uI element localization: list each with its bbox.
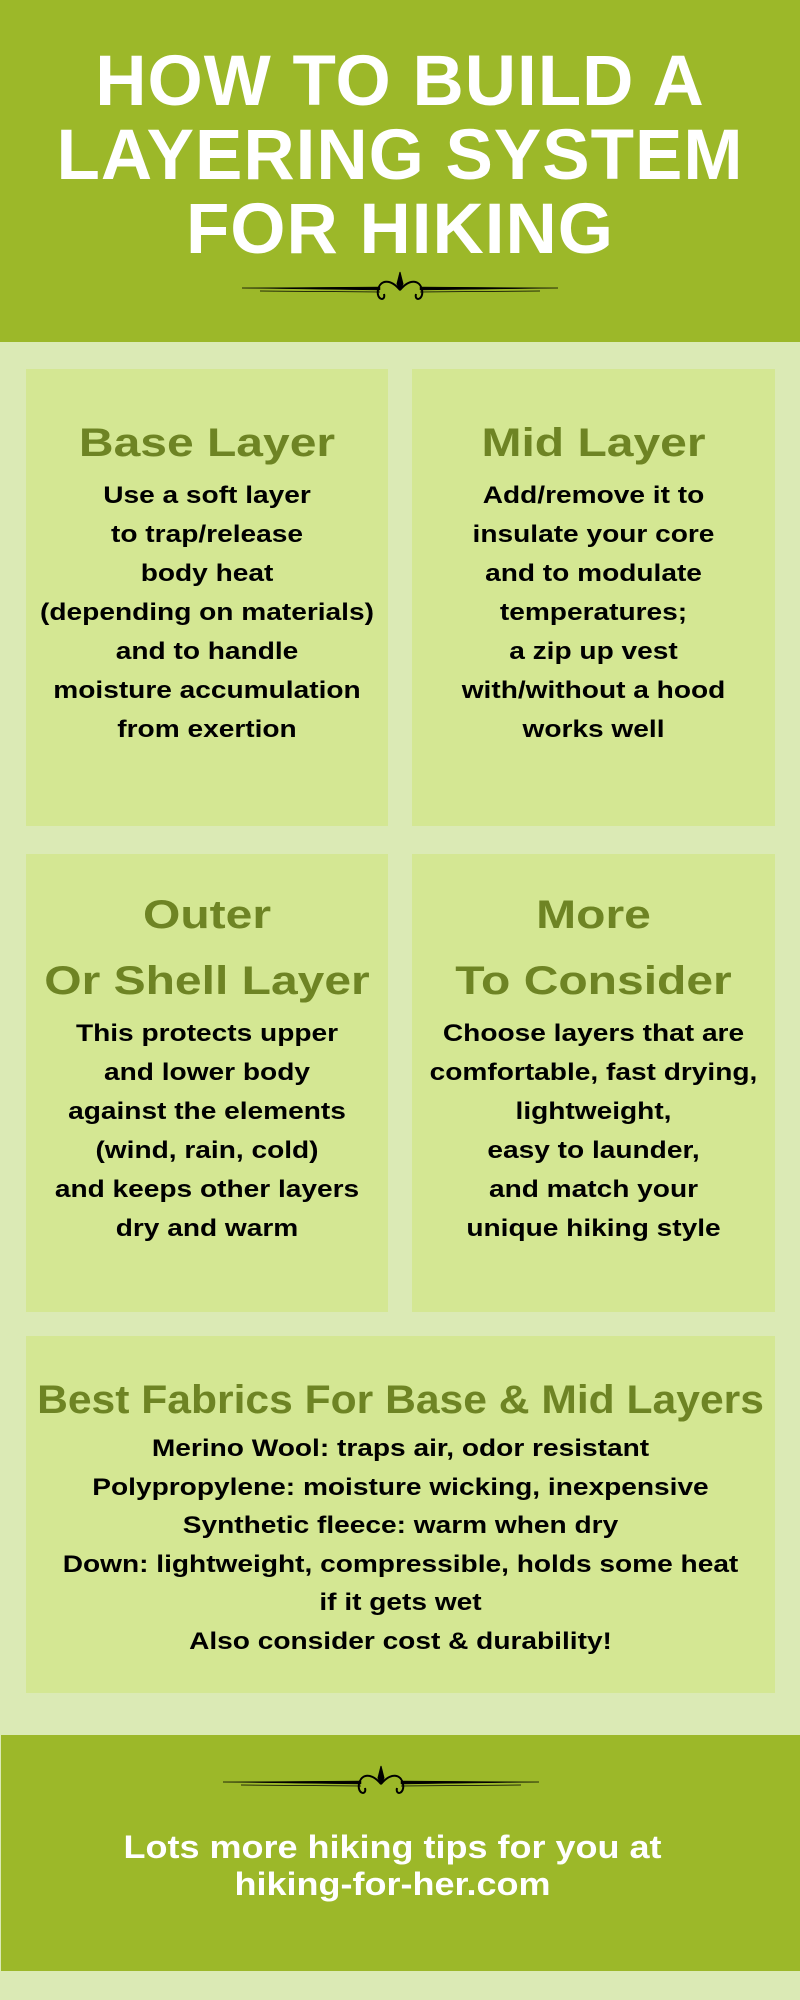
text: mid layer: works well: [522, 716, 665, 743]
text: fabrics list: Polypropylene: moisture wicking, inexpensive: [92, 1474, 709, 1500]
title: HOW TO BUILD A: [95, 42, 705, 121]
text: mid layer: and to modulate: [485, 560, 702, 587]
heading: mid layer: Mid Layer: [481, 421, 706, 465]
text: fabrics list: if it gets wet: [319, 1589, 482, 1616]
panel: outer layer: [26, 854, 388, 1312]
text: base layer: from exertion: [117, 716, 297, 743]
title: [56, 42, 744, 269]
text: base layer: moisture accumulation: [53, 677, 361, 704]
text: mid layer: Add/remove it to: [483, 482, 704, 509]
panel: more to consider: [412, 854, 775, 1312]
header banner: [0, 0, 800, 342]
text: more to consider: [430, 1020, 757, 1242]
text: outer layer: and keeps other layers: [55, 1176, 359, 1203]
ornament divider: [242, 272, 558, 300]
panel: best fabrics: [26, 1336, 775, 1693]
footer text: hiking-for-her.com: [234, 1866, 551, 1902]
heading: best fabrics: Best Fabrics For Base & Mid Layers: [37, 1378, 764, 1422]
text: fabrics list: Also consider cost & durability!: [189, 1628, 612, 1654]
text: more to consider: and match your: [489, 1176, 698, 1203]
footer banner: [1, 1735, 800, 1971]
text: base layer: and to handle: [116, 638, 298, 665]
panel: mid layer: [412, 369, 775, 826]
text: outer layer: This protects upper: [76, 1020, 338, 1047]
text: mid layer: insulate your core: [473, 521, 714, 548]
text: fabrics list: Down: lightweight, compressible, holds some heat: [63, 1550, 738, 1578]
text: fabrics list: [63, 1435, 738, 1654]
text: outer layer: against the elements: [68, 1098, 346, 1125]
text: base layer: body heat: [141, 560, 273, 587]
heading: base layer: Base Layer: [79, 421, 335, 465]
text: fabrics list: Synthetic fleece: warm when dry: [183, 1512, 618, 1539]
text: mid layer: [462, 482, 725, 743]
footer text: [123, 1829, 662, 1902]
text: base layer: Use a soft layer: [103, 482, 311, 509]
text: mid layer: a zip up vest: [509, 638, 678, 665]
text: mid layer: with/without a hood: [462, 677, 725, 704]
text: outer layer: (wind, rain, cold): [95, 1137, 319, 1164]
text: more to consider: unique hiking style: [466, 1215, 721, 1242]
text: base layer: [40, 482, 374, 743]
panel: base layer: [26, 369, 388, 826]
text: more to consider: easy to launder,: [487, 1137, 700, 1164]
text: fabrics list: Merino Wool: traps air, odor resistant: [152, 1435, 649, 1462]
text: base layer: (depending on materials): [40, 599, 374, 626]
heading: outer layer: Or Shell Layer: [44, 959, 370, 1003]
text: outer layer: dry and warm: [116, 1215, 298, 1242]
heading: more to consider: To Consider: [455, 959, 732, 1003]
heading: more to consider: More: [536, 893, 651, 937]
heading: outer layer: [44, 893, 370, 1003]
text: more to consider: lightweight,: [516, 1098, 671, 1125]
ornament divider: [223, 1766, 539, 1794]
text: outer layer: [55, 1020, 359, 1242]
heading: outer layer: Outer: [143, 893, 271, 937]
title: LAYERING SYSTEM: [56, 116, 744, 195]
text: mid layer: temperatures;: [500, 599, 687, 626]
heading: more to consider: [455, 893, 732, 1003]
text: outer layer: and lower body: [104, 1059, 310, 1086]
footer text: Lots more hiking tips for you at: [123, 1829, 662, 1865]
title: FOR HIKING: [186, 190, 614, 269]
text: base layer: to trap/release: [111, 521, 303, 548]
text: more to consider: comfortable, fast drying,: [430, 1059, 757, 1086]
text: more to consider: Choose layers that are: [443, 1020, 744, 1047]
